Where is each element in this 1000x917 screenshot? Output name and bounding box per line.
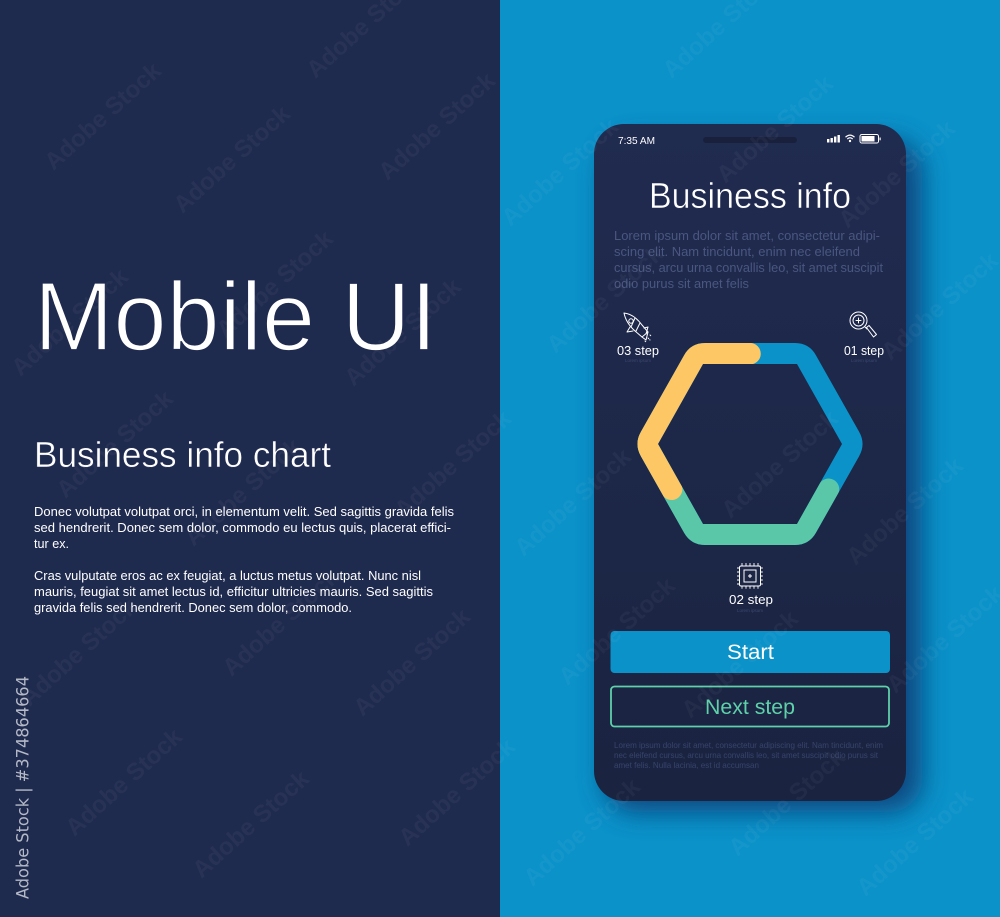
description: paragraph 1: tur ex. bbox=[34, 537, 69, 551]
label: 02 step: 02 step bbox=[729, 592, 773, 607]
segment: 03 yellow bbox=[646, 354, 750, 489]
watermarks: Adobe Stock bbox=[211, 225, 339, 344]
label: 03 step: 03 step bbox=[617, 343, 659, 358]
description: paragraph 2: mauris, feugiat sit amet lectus id, efficitur ultricies mauris. Sed sagittis bbox=[34, 585, 433, 599]
caption: 01 step: Lorem ipsum bbox=[851, 358, 877, 363]
button: start: Start bbox=[727, 641, 774, 664]
watermarks: Adobe Stock bbox=[841, 452, 969, 571]
watermarks: Adobe Stock bbox=[348, 603, 476, 722]
watermarks: Adobe Stock bbox=[60, 723, 188, 842]
watermarks: Adobe Stock bbox=[851, 783, 979, 902]
watermarks: Adobe Stock bbox=[509, 443, 637, 562]
watermarks: Adobe Stock bbox=[676, 605, 804, 724]
status time: 7:35 AM bbox=[618, 135, 655, 147]
watermarks: Adobe Stock bbox=[496, 113, 624, 232]
phone intro text: Lorem ipsum dolor sit amet, consectetur adipi- bbox=[614, 228, 880, 243]
phone intro text bbox=[614, 228, 883, 291]
phone footnote: nec eleifend cursus, arcu urna convallis leo, sit amet suscipit odio purus sit bbox=[614, 750, 879, 760]
phone shadow bbox=[604, 140, 922, 812]
description: paragraph 1: sed hendrerit. Donec sem dolor, commodo eu lectus quis, placerat effici- bbox=[34, 521, 451, 535]
icon: magnifier bbox=[850, 312, 876, 337]
button: start bbox=[610, 631, 890, 673]
step 01 bbox=[844, 312, 884, 363]
watermarks: Adobe Stock bbox=[51, 385, 179, 504]
icon: chip bbox=[737, 563, 763, 589]
phone footnote: Lorem ipsum dolor sit amet, consectetur adipiscing elit. Nam tincidunt, enim bbox=[614, 740, 883, 750]
caption: 02 step: Lorem ipsum bbox=[737, 608, 763, 613]
watermarks: Adobe Stock bbox=[15, 593, 143, 712]
watermarks: Adobe Stock bbox=[711, 70, 839, 189]
label: 01 step: 01 step bbox=[844, 343, 884, 358]
watermarks: Adobe Stock bbox=[876, 247, 1000, 366]
left panel background bbox=[0, 0, 500, 917]
phone intro text: scing elit. Nam tincidunt, enim nec eleifend bbox=[614, 244, 860, 259]
icon: wifi bbox=[846, 135, 854, 142]
step 02 bbox=[729, 563, 773, 613]
description: paragraph 2 bbox=[34, 569, 433, 615]
phone intro text: cursus, arcu urna convallis leo, sit amet suscipit bbox=[614, 260, 883, 275]
phone intro text: odio purus sit amet felis bbox=[614, 276, 749, 291]
phone heading: Business info bbox=[649, 175, 851, 216]
stock id vertical text: Adobe Stock | #374864664 bbox=[14, 676, 34, 899]
watermarks: Adobe Stock bbox=[389, 405, 517, 524]
watermarks: Adobe Stock bbox=[833, 115, 961, 234]
notch bbox=[703, 137, 797, 143]
watermarks: Adobe Stock bbox=[518, 773, 646, 892]
icon: battery bbox=[860, 134, 881, 143]
phone footnote bbox=[614, 740, 883, 770]
watermarks: Adobe Stock bbox=[168, 100, 296, 219]
watermarks: Adobe Stock bbox=[6, 263, 134, 382]
segment: 01 blue bbox=[630, 340, 870, 550]
watermarks: Adobe Stock bbox=[553, 572, 681, 691]
watermarks: Adobe Stock bbox=[723, 743, 851, 862]
button: next step: Next step bbox=[705, 696, 795, 719]
title: Mobile UI bbox=[34, 262, 437, 371]
caption: 03 step: Lorem ipsum bbox=[625, 358, 651, 363]
watermarks: Adobe Stock bbox=[716, 405, 844, 524]
description: paragraph 2: gravida felis sed hendrerit. Donec sem dolor, commodo. bbox=[34, 601, 352, 615]
segment: 02 green bbox=[646, 444, 828, 534]
watermarks: Adobe Stock bbox=[393, 733, 521, 852]
status bar bbox=[618, 134, 881, 147]
button: next step bbox=[611, 686, 889, 726]
watermarks: Adobe Stock bbox=[179, 433, 307, 552]
icon: signal bars bbox=[827, 135, 840, 142]
phone body bbox=[594, 124, 906, 801]
watermarks: Adobe Stock bbox=[217, 563, 345, 682]
watermarks: Adobe Stock bbox=[541, 240, 669, 359]
phone footnote: amet felis. Nulla lacinia, est id accumsan bbox=[614, 760, 759, 770]
description: paragraph 2: Cras vulputate eros ac ex feugiat, a luctus metus volutpat. Nunc nisl bbox=[34, 569, 421, 583]
watermarks: Adobe Stock bbox=[373, 67, 501, 186]
right panel background bbox=[500, 0, 1000, 917]
watermarks: Adobe Stock bbox=[339, 273, 467, 392]
icon: rocket bbox=[624, 313, 651, 342]
subtitle: Business info chart bbox=[34, 434, 331, 475]
description: paragraph 1 bbox=[34, 505, 454, 551]
description: paragraph 1: Donec volutpat volutpat orci, in elementum velit. Sed sagittis gravida felis bbox=[34, 505, 454, 519]
hexagon chart bbox=[630, 340, 870, 550]
watermarks: Adobe Stock bbox=[39, 57, 167, 176]
watermarks: Adobe Stock bbox=[187, 765, 315, 884]
step 03 bbox=[617, 313, 659, 363]
